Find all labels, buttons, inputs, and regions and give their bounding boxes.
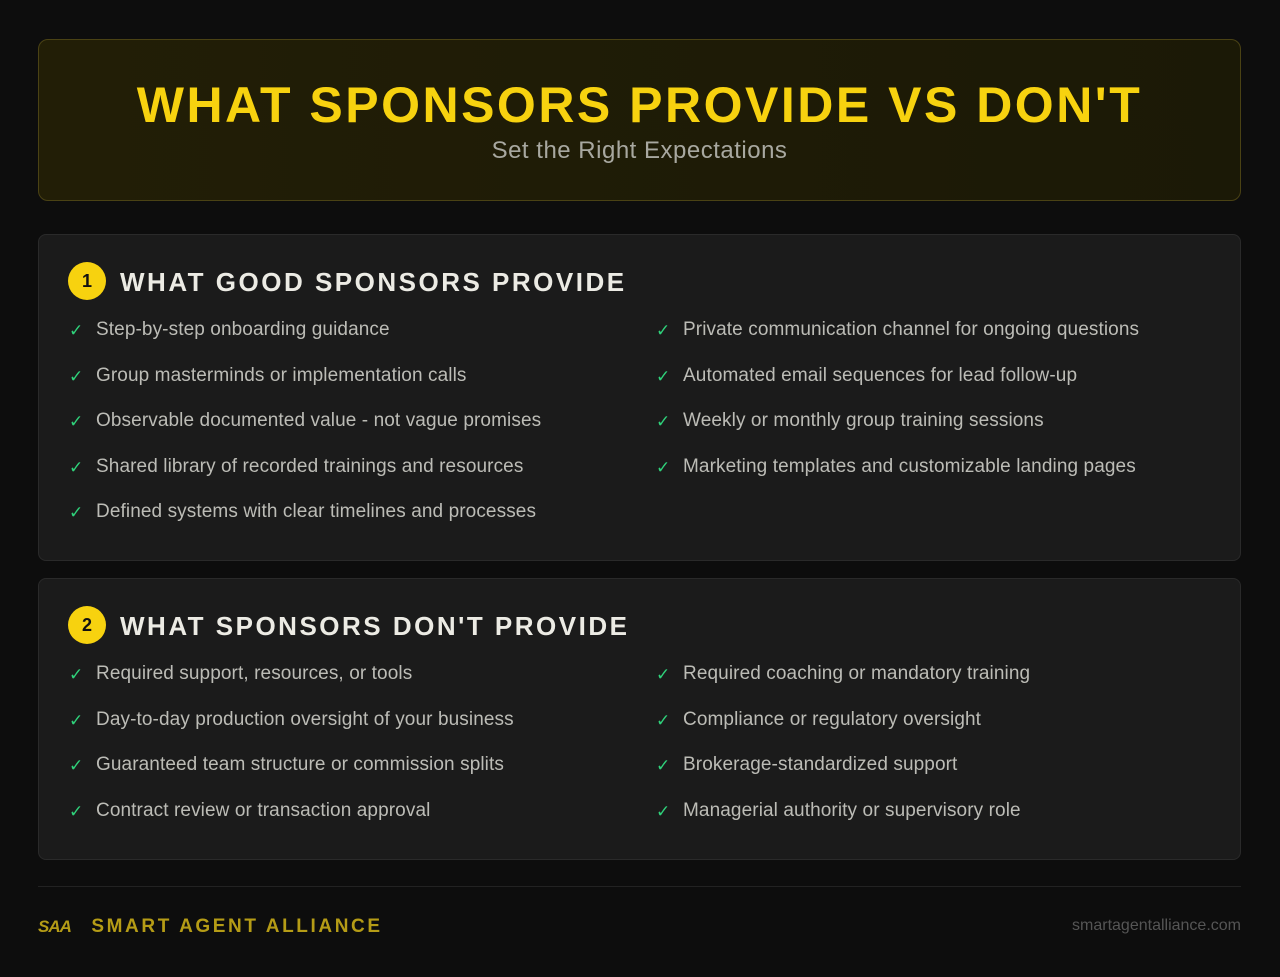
panel: what sponsors don't provide: Required coaching or mandatory training: [683, 663, 1030, 684]
panel: what good sponsors provide: ✓: [656, 367, 670, 386]
panel: what sponsors don't provide: ✓: [69, 711, 83, 730]
list left: [69, 663, 514, 821]
panel: what good sponsors provide: Group masterminds or implementation calls: [96, 365, 467, 386]
panel: what good sponsors provide: Step-by-step onboarding guidance: [96, 319, 390, 340]
panel: what sponsors don't provide: Guaranteed team structure or commission splits: [96, 754, 504, 775]
panel: what good sponsors provide: Weekly or monthly group training sessions: [683, 410, 1044, 431]
header banner: [38, 39, 1241, 201]
panel: what good sponsors provide: ✓: [69, 503, 83, 522]
panel: what good sponsors provide: ✓: [656, 458, 670, 477]
panel: what sponsors don't provide: ✓: [69, 756, 83, 775]
panel: what good sponsors provide: Shared library of recorded trainings and resources: [96, 456, 523, 477]
panel: what sponsors don't provide: Day-to-day production oversight of your business: [96, 709, 514, 730]
list right: [656, 663, 1030, 821]
badge 2: [68, 606, 106, 644]
heading: WHAT GOOD SPONSORS PROVIDE: [120, 267, 627, 297]
panel: what sponsors don't provide: [38, 578, 1241, 860]
footer logo: SAA SMART AGENT ALLIANCE: [38, 916, 383, 937]
list left: [69, 319, 541, 522]
list right: [656, 319, 1139, 477]
panel: what good sponsors provide: ✓: [69, 458, 83, 477]
title: WHAT SPONSORS PROVIDE VS DON'T: [137, 77, 1142, 133]
panel: what good sponsors provide: ✓: [69, 367, 83, 386]
panel: what good sponsors provide: ✓: [656, 412, 670, 431]
panel: what sponsors don't provide: Required support, resources, or tools: [96, 663, 412, 684]
panel: what good sponsors provide: Automated email sequences for lead follow-up: [683, 365, 1077, 386]
badge 1: [68, 262, 106, 300]
panel: what good sponsors provide: [38, 234, 1241, 561]
panel: what good sponsors provide: Private communication channel for ongoing questions: [683, 319, 1139, 340]
panel: what good sponsors provide: Marketing templates and customizable landing pages: [683, 456, 1136, 477]
heading: WHAT SPONSORS DON'T PROVIDE: [120, 611, 629, 641]
subtitle: Set the Right Expectations: [492, 137, 787, 164]
panel: what sponsors don't provide: ✓: [69, 802, 83, 821]
panel: what sponsors don't provide: Compliance or regulatory oversight: [683, 709, 981, 730]
panel: what sponsors don't provide: ✓: [656, 802, 670, 821]
badge 2: 2: [82, 615, 92, 635]
panel: what sponsors don't provide: Contract review or transaction approval: [96, 800, 430, 821]
panel: what good sponsors provide: ✓: [69, 321, 83, 340]
panel: what good sponsors provide: Defined systems with clear timelines and processes: [96, 501, 536, 522]
panel: what good sponsors provide: ✓: [656, 321, 670, 340]
panel: what sponsors don't provide: Managerial authority or supervisory role: [683, 800, 1021, 821]
footer url: smartagentalliance.com: [1072, 917, 1241, 934]
panel: what good sponsors provide: Observable documented value - not vague promises: [96, 410, 541, 431]
panel: what sponsors don't provide: ✓: [69, 665, 83, 684]
panel: what sponsors don't provide: ✓: [656, 711, 670, 730]
panel: what sponsors don't provide: ✓: [656, 756, 670, 775]
badge 1: 1: [82, 271, 92, 291]
panel: what sponsors don't provide: Brokerage-standardized support: [683, 754, 957, 775]
panel: what good sponsors provide: ✓: [69, 412, 83, 431]
panel: what sponsors don't provide: ✓: [656, 665, 670, 684]
